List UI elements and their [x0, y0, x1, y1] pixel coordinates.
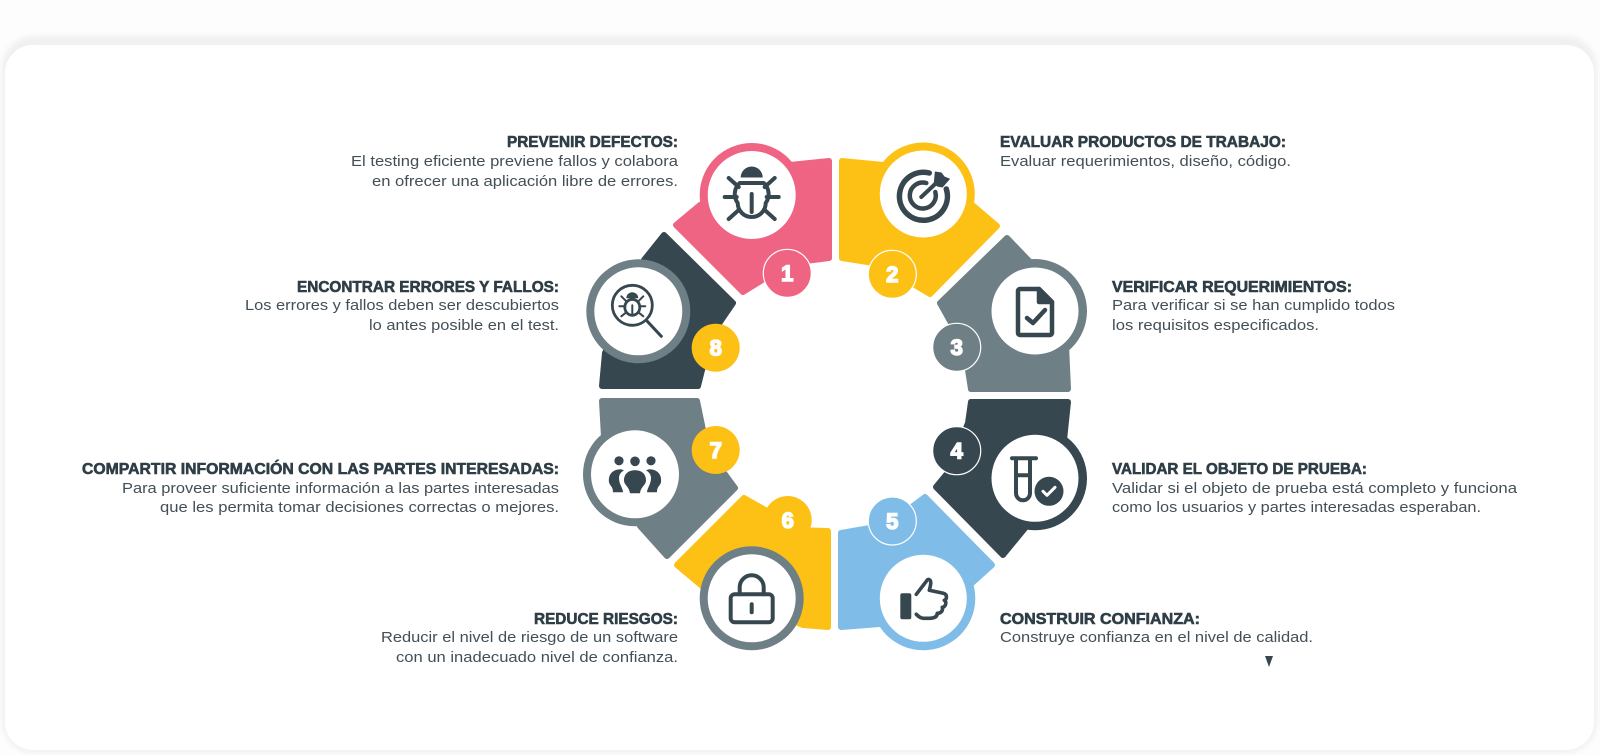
- number 8: [692, 324, 740, 372]
- text: evaluar productos: EVALUAR PRODUCTOS DE TRABAJO:: [1000, 134, 1286, 151]
- text: construir confianza: Construye confianza en el nivel de calidad.: [1000, 629, 1313, 646]
- text: compartir información: [82, 460, 559, 516]
- number 4: 4: [951, 438, 964, 464]
- number 2: 2: [886, 262, 898, 287]
- text: evaluar productos: [1000, 134, 1291, 170]
- text: prevenir defectos: PREVENIR DEFECTOS:: [507, 134, 678, 151]
- text: validar objeto: [1112, 461, 1518, 516]
- text: reduce riesgos: [381, 611, 678, 666]
- text: reduce riesgos: REDUCE RIESGOS:: [534, 611, 678, 628]
- icon: target: [899, 172, 949, 220]
- number 5: [868, 497, 916, 545]
- number 2: [868, 250, 916, 298]
- text: prevenir defectos: en ofrecer una aplicación libre de errores.: [372, 173, 678, 190]
- text: verificar requerimientos: VERIFICAR REQUERIMIENTOS:: [1112, 279, 1352, 296]
- segment 4: dark: [933, 402, 1087, 555]
- text: compartir información: Para proveer suficiente información a las partes interesadas: [122, 480, 559, 497]
- segment 7: gray: [583, 401, 740, 556]
- icon: padlock: [731, 575, 773, 622]
- number 1: 1: [781, 261, 793, 286]
- text: encontrar errores: [245, 279, 559, 334]
- text: prevenir defectos: El testing eficiente previene fallos y colabora: [351, 153, 679, 170]
- text: reduce riesgos: con un inadecuado nivel de confianza.: [396, 649, 678, 666]
- text: verificar requerimientos: [1112, 279, 1395, 334]
- text: validar objeto: como los usuarios y partes interesadas esperaban.: [1112, 499, 1481, 516]
- icon: test tube: [1012, 458, 1064, 506]
- text: reduce riesgos: Reducir el nivel de riesgo de un software: [381, 629, 678, 646]
- number 4: [933, 427, 981, 475]
- text: validar objeto: VALIDAR EL OBJETO DE PRUEBA:: [1112, 461, 1367, 478]
- text: prevenir defectos: [351, 134, 679, 190]
- text: encontrar errores: ENCONTRAR ERRORES Y FALLOS:: [297, 279, 559, 296]
- segment 5: blue: [841, 497, 992, 650]
- text: encontrar errores: Los errores y fallos deben ser descubiertos: [245, 297, 559, 314]
- text: validar objeto: Validar si el objeto de prueba está completo y funciona: [1112, 480, 1518, 497]
- number 8: 8: [710, 336, 722, 360]
- icon: people: [609, 456, 661, 493]
- text: verificar requerimientos: los requisitos especificados.: [1112, 317, 1319, 334]
- text: encontrar errores: lo antes posible en el test.: [369, 317, 559, 334]
- text: construir confianza: CONSTRUIR CONFIANZA:: [1000, 611, 1200, 628]
- icon: magnifier with bug: [612, 285, 661, 336]
- number 1: [763, 249, 811, 297]
- segment 1: pink: [676, 143, 829, 297]
- number 7: [692, 426, 740, 474]
- text: compartir información: que les permita tomar decisiones correctas o mejores.: [160, 499, 559, 516]
- segment 3: gray: [933, 238, 1087, 389]
- segment 8: dark: [586, 235, 740, 386]
- segment 6: yellow: [677, 496, 828, 650]
- number 6: 6: [782, 508, 794, 533]
- number 3: [933, 323, 981, 371]
- icon: bug: [725, 166, 779, 219]
- icon: document check: [1018, 289, 1052, 335]
- icon: thumbs up: [900, 579, 946, 619]
- text: verificar requerimientos: Para verificar si se han cumplido todos: [1112, 297, 1395, 314]
- text: evaluar productos: Evaluar requerimientos, diseño, código.: [1000, 153, 1291, 170]
- number 7: 7: [710, 438, 722, 463]
- text: compartir información: COMPARTIR INFORMACIÓN CON LAS PARTES INTERESADAS:: [82, 460, 559, 478]
- text: construir confianza: [1000, 611, 1313, 646]
- number 3: 3: [951, 335, 963, 360]
- segment 2: yellow: [842, 142, 997, 298]
- icon: small triangle: [1265, 656, 1273, 667]
- number 5: 5: [886, 509, 898, 534]
